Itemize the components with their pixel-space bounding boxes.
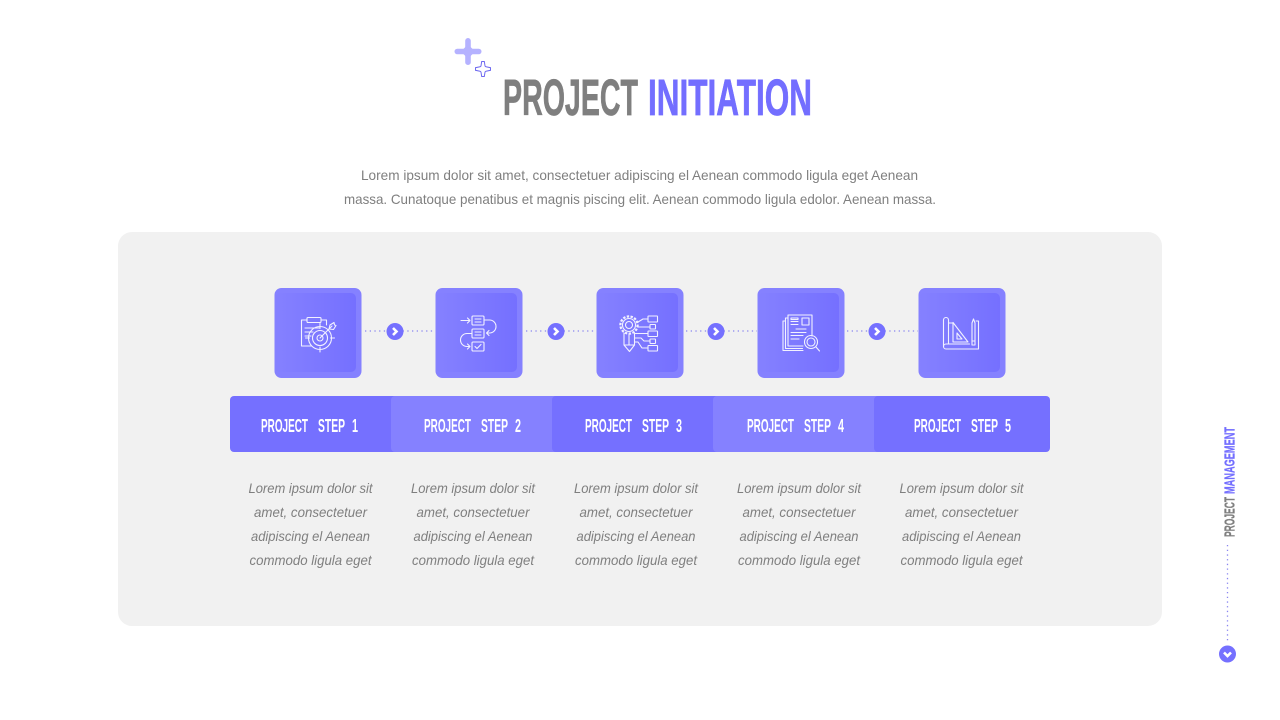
step 2 description: adipiscing el Aenean xyxy=(414,528,533,544)
step 3 description: commodo ligula eget xyxy=(575,552,698,568)
title: PROJECT xyxy=(503,69,638,126)
step banner 4: 4 xyxy=(838,416,844,436)
step 1 description xyxy=(248,480,374,568)
step 3 description: amet, consectetuer xyxy=(580,504,694,520)
panel: project steps xyxy=(118,232,1162,626)
step 5 description: amet, consectetuer xyxy=(905,504,1019,520)
arrow button 2 xyxy=(548,323,564,340)
side label: project management: PROJECT xyxy=(1222,497,1238,537)
step banner 2: 2 xyxy=(515,416,521,436)
step banner 5: STEP xyxy=(971,416,998,436)
arrow button 1 xyxy=(386,323,404,340)
step 1 description: Lorem ipsum dolor sit xyxy=(248,480,374,496)
step banner 2 xyxy=(391,396,566,452)
step 1 description: adipiscing el Aenean xyxy=(251,528,370,544)
step 2 description: commodo ligula eget xyxy=(412,552,535,568)
title: INITIATION xyxy=(648,69,812,126)
icon tile 5: blueprint and set square xyxy=(918,288,1006,378)
step 4 description xyxy=(737,480,862,568)
side scroll indicator xyxy=(1219,545,1236,662)
step 3 description: adipiscing el Aenean xyxy=(576,528,696,544)
step 2 description: Lorem ipsum dolor sit xyxy=(411,480,536,496)
step 5 description: adipiscing el Aenean xyxy=(902,528,1021,544)
step 2 description xyxy=(411,480,536,568)
step 5 description: commodo ligula eget xyxy=(900,552,1024,568)
step banner 2: PROJECT xyxy=(424,416,471,436)
step banner 1: STEP xyxy=(318,416,345,436)
step banner 4: STEP xyxy=(804,416,831,436)
arrow button 4 xyxy=(868,323,886,340)
step 1 description: commodo ligula eget xyxy=(250,552,373,568)
step 5 description xyxy=(900,480,1025,568)
step banner 5 xyxy=(874,396,1050,452)
side label: project management: MANAGEMENT xyxy=(1222,427,1238,494)
step banner 3: PROJECT xyxy=(585,416,632,436)
icon tile 3: gear pencil mind map xyxy=(596,288,684,378)
step banner 1: 1 xyxy=(352,416,358,436)
icon tile 1: target and clipboard xyxy=(274,288,362,378)
icon tile 4: documents and magnifier xyxy=(758,288,844,378)
step banner 3: 3 xyxy=(676,416,682,436)
step 4 description: adipiscing el Aenean xyxy=(740,528,859,544)
step banner 5: PROJECT xyxy=(914,416,961,436)
step banner 2: STEP xyxy=(481,416,508,436)
intro paragraph: Lorem ipsum dolor sit amet, consectetuer adipiscing el Aenean commodo ligula eget Aenean xyxy=(361,167,918,183)
step banner 3: STEP xyxy=(642,416,669,436)
step 2 description: amet, consectetuer xyxy=(416,504,531,520)
icon tile 2: workflow xyxy=(436,288,522,378)
step banner 4: PROJECT xyxy=(747,416,794,436)
side label: project management xyxy=(1222,427,1238,537)
step 4 description: amet, consectetuer xyxy=(742,504,857,520)
icon: large filled sparkle xyxy=(454,38,482,65)
icon: small outline sparkle xyxy=(476,62,491,77)
connector dotted lines xyxy=(365,330,918,332)
step banner 4 xyxy=(713,396,888,452)
intro paragraph xyxy=(344,167,936,207)
intro paragraph: massa. Cunatoque penatibus et magnis piscing elit. Aenean commodo ligula edolor. Aenean massa. xyxy=(344,191,936,207)
step 4 description: Lorem ipsum dolor sit xyxy=(737,480,862,496)
step banner 1: PROJECT xyxy=(261,416,308,436)
step 5 description: Lorem ipsum dolor sit xyxy=(900,480,1025,496)
step 3 description: Lorem ipsum dolor sit xyxy=(574,480,699,496)
step 4 description: commodo ligula eget xyxy=(738,552,861,568)
step banner 3 xyxy=(552,396,727,452)
step 1 description: amet, consectetuer xyxy=(254,504,368,520)
step banner 1 xyxy=(230,396,407,452)
step 3 description xyxy=(574,480,699,568)
arrow button 3 xyxy=(708,323,724,340)
step banner 5: 5 xyxy=(1005,416,1011,436)
